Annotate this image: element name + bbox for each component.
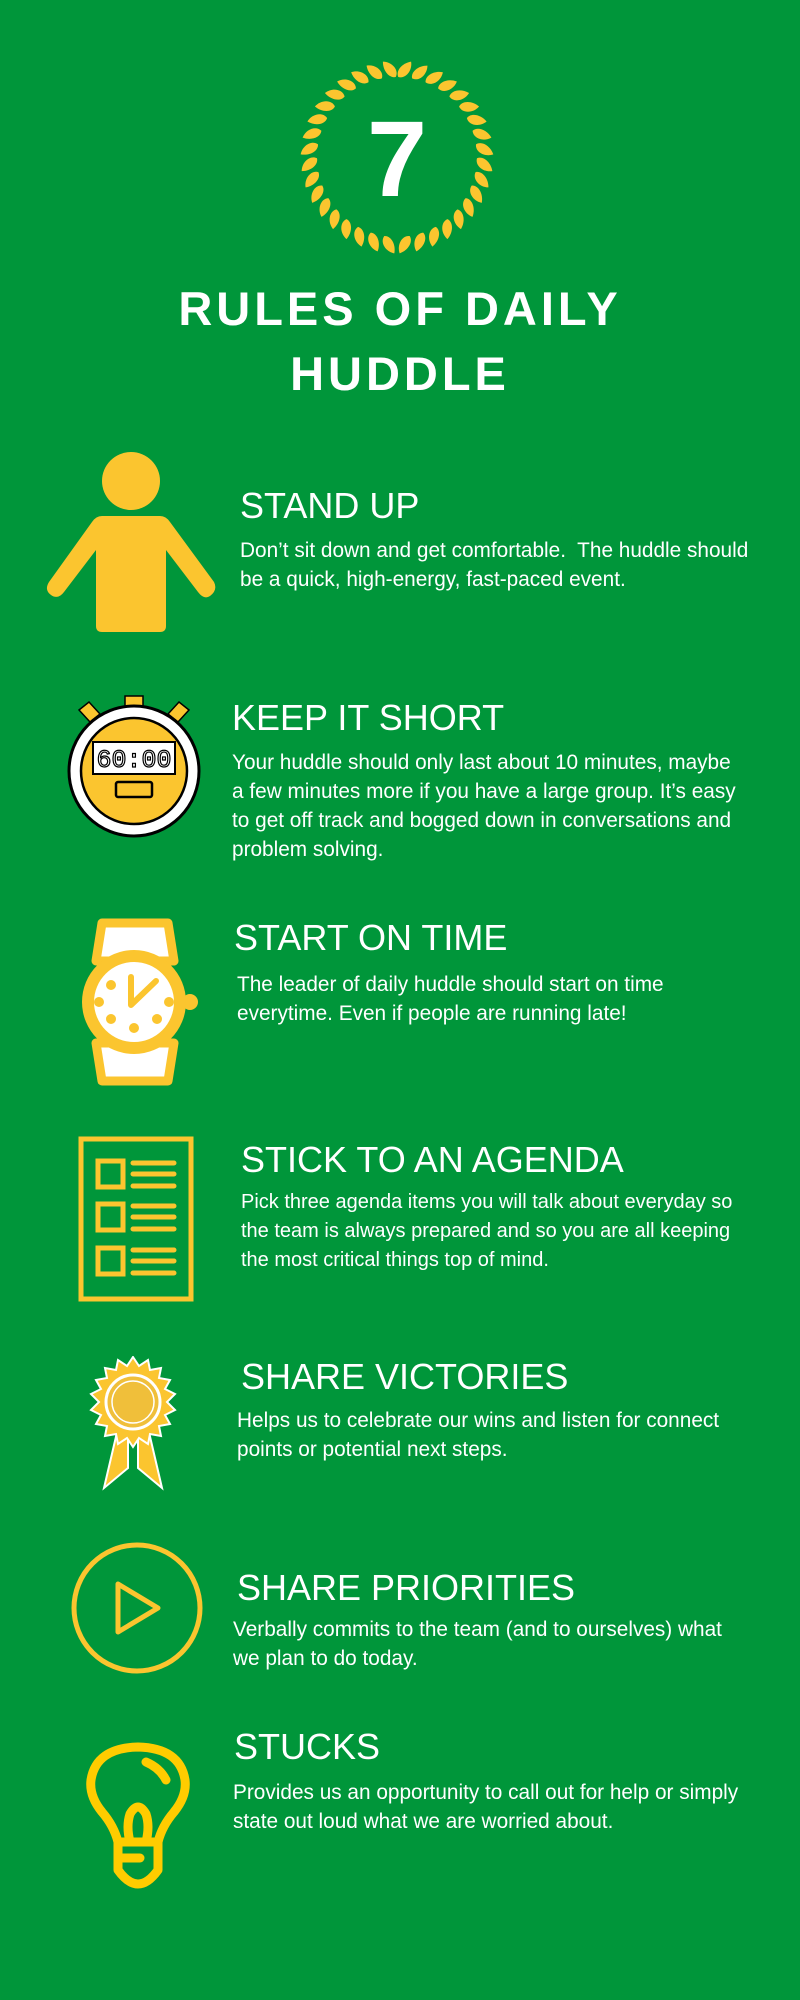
text: keep it short xyxy=(232,751,736,861)
text: stick to an agenda: the most critical things top of mind. xyxy=(241,1249,549,1271)
text: share victories xyxy=(237,1409,719,1461)
text: share victories: Helps us to celebrate our wins and listen for connect xyxy=(237,1409,719,1432)
text: stand up: Don’t sit down and get comfortable. The huddle should xyxy=(240,539,748,562)
heading: start on time: START ON TIME xyxy=(234,917,507,958)
heading: stick to an agenda: STICK TO AN AGENDA xyxy=(241,1139,624,1180)
title: HUDDLE xyxy=(290,347,510,400)
text: keep it short: problem solving. xyxy=(232,838,383,861)
text: start on time xyxy=(237,973,664,1025)
icon: agenda checklist xyxy=(78,1136,194,1302)
text: keep it short: a few minutes more if you have a large group. It’s easy xyxy=(232,780,736,803)
text: stucks xyxy=(233,1781,738,1833)
heading: stand up: STAND UP xyxy=(240,485,419,526)
text: stand up: be a quick, high-energy, fast-paced event. xyxy=(240,568,626,591)
text: start on time: everytime. Even if people are running late! xyxy=(237,1002,627,1025)
title xyxy=(178,282,622,400)
text: share priorities: we plan to do today. xyxy=(233,1647,418,1670)
icon: standing person xyxy=(46,452,216,632)
title: RULES OF DAILY xyxy=(178,282,622,335)
text: share priorities xyxy=(233,1618,722,1670)
icon: laurel wreath with number 7 xyxy=(300,62,494,254)
text: stick to an agenda: the team is always prepared and so you are all keeping xyxy=(241,1220,730,1242)
text: stick to an agenda: Pick three agenda items you will talk about everyday so xyxy=(241,1191,732,1213)
icon: stopwatch: 60:00 xyxy=(96,746,172,775)
heading: keep it short: KEEP IT SHORT xyxy=(232,697,504,738)
icon: wristwatch xyxy=(82,918,198,1086)
icon: light bulb xyxy=(86,1742,190,1888)
text: share priorities: Verbally commits to the team (and to ourselves) what xyxy=(233,1618,722,1641)
text: keep it short: Your huddle should only last about 10 minutes, maybe xyxy=(232,751,731,774)
icon: stopwatch xyxy=(68,695,200,838)
text: stucks: state out loud what we are worried about. xyxy=(233,1810,613,1833)
icon: play button xyxy=(72,1542,202,1674)
text: stucks: Provides us an opportunity to call out for help or simply xyxy=(233,1781,738,1804)
text: stick to an agenda xyxy=(241,1191,732,1271)
text: stand up xyxy=(240,539,748,591)
text: start on time: The leader of daily huddle should start on time xyxy=(237,973,664,996)
heading: share priorities: SHARE PRIORITIES xyxy=(237,1567,575,1608)
text: keep it short: to get off track and bogged down in conversations and xyxy=(232,809,731,832)
heading: share victories: SHARE VICTORIES xyxy=(241,1356,568,1397)
icon: award ribbon xyxy=(89,1356,177,1491)
text: share victories: points or potential next steps. xyxy=(237,1438,508,1461)
heading: stucks: STUCKS xyxy=(234,1726,380,1767)
icon: laurel wreath with number 7: 7 xyxy=(367,98,427,219)
